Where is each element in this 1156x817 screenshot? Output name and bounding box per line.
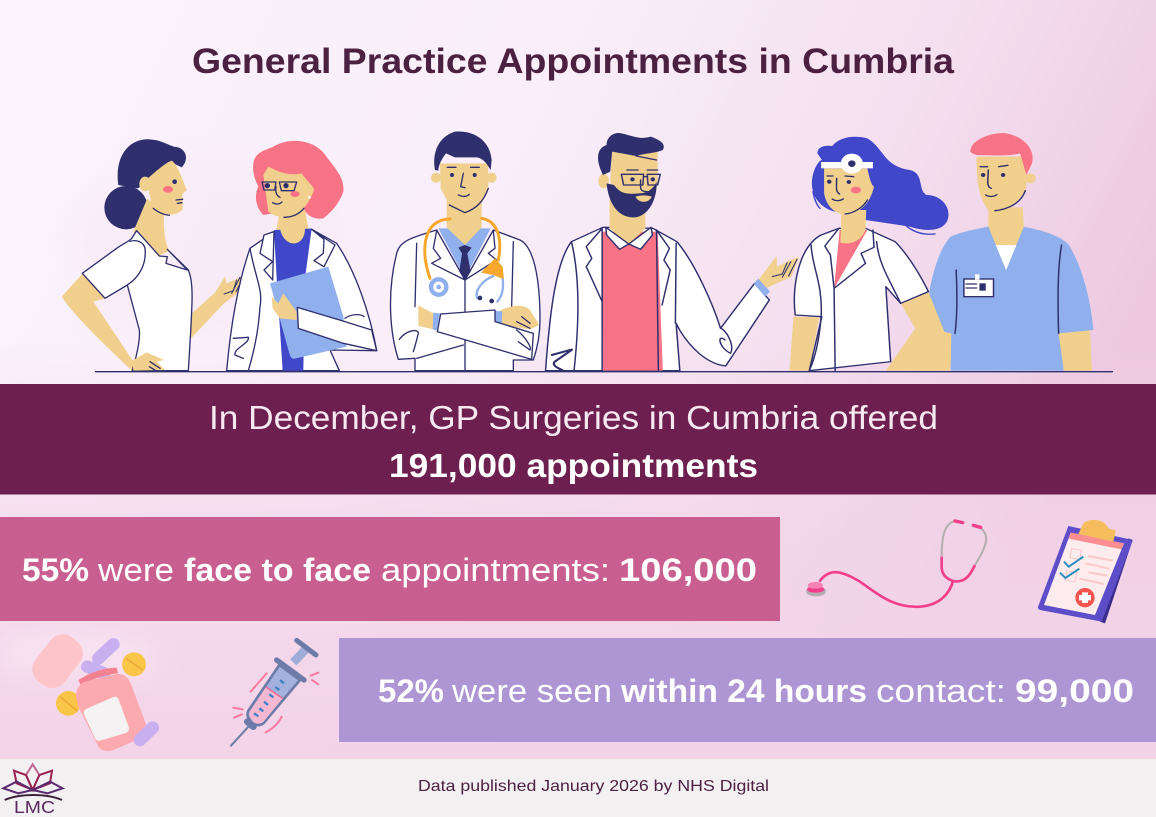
figure: nurse in blue scrubs (921, 133, 1093, 371)
figure: doctor with blue hair and head mirror (790, 137, 949, 371)
banner: total appointments: In December, GP Surgeries in Cumbria offered (209, 399, 938, 436)
footer source note: Data published January 2026 by NHS Digital (418, 778, 769, 795)
banner: total appointments: 191,000 appointments (389, 447, 758, 484)
logo: LMC lotus (3, 764, 63, 817)
banner: face to face (0, 517, 780, 621)
banner: face to face: were (97, 552, 174, 588)
logo: LMC lotus: LMC (14, 797, 55, 817)
banner: face to face: appointments: (381, 552, 610, 588)
banner: within 24 hours: were seen (451, 673, 612, 709)
banner: total appointments (0, 384, 1156, 494)
banner: within 24 hours: 99,000 (1015, 673, 1134, 709)
icon: clipboard (1038, 520, 1133, 623)
banner: within 24 hours (339, 638, 1156, 742)
figure: doctor with pink hair and folder (227, 141, 377, 371)
figure: nurse with dark hair (62, 139, 246, 371)
banner: face to face: 55% (22, 552, 89, 588)
banner: face to face: face to face (184, 552, 371, 588)
banner: within 24 hours: within 24 hours (620, 673, 867, 709)
banner: face to face: 106,000 (619, 552, 757, 588)
illustration: medical team (62, 131, 1113, 372)
figure: bearded doctor (546, 133, 799, 371)
figure: doctor with stethoscope and crossed arms (390, 131, 540, 371)
title: General Practice Appointments in Cumbria (192, 42, 955, 81)
banner: within 24 hours: contact: (876, 673, 1006, 709)
icon: syringe (231, 640, 318, 746)
icon: pill bottle (26, 628, 153, 751)
icon: stethoscope (806, 521, 986, 607)
floor line (95, 371, 1113, 373)
banner: within 24 hours: 52% (378, 673, 444, 709)
footer bar (0, 759, 1156, 817)
